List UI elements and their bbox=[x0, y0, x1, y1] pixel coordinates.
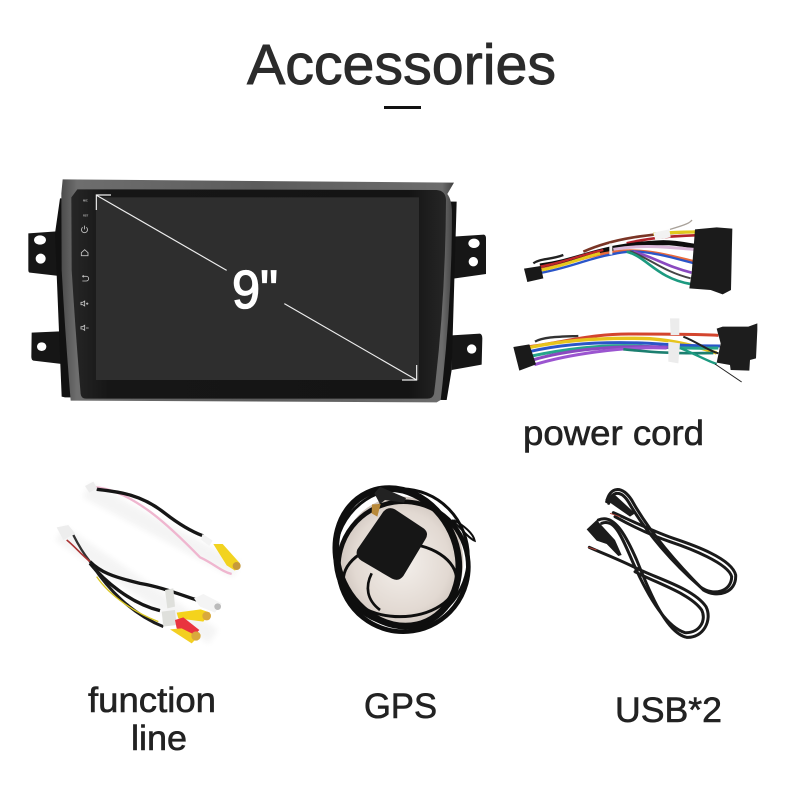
icon: power bbox=[81, 226, 87, 233]
USB cable loops bbox=[589, 490, 736, 637]
side buttons bbox=[81, 199, 89, 330]
USB plug one bbox=[605, 493, 635, 517]
upper yellow RCA plug bbox=[201, 534, 241, 571]
white RCA plug bbox=[194, 594, 222, 613]
black bezel bbox=[71, 189, 446, 399]
upper small connector bbox=[524, 266, 543, 282]
SMA plug bbox=[372, 487, 406, 517]
lower small connector bbox=[513, 344, 536, 371]
panel: 9 inch head unit bbox=[28, 179, 486, 402]
disc behind coil bbox=[340, 497, 463, 627]
size label: 9" bbox=[232, 260, 278, 320]
function: function bbox=[88, 681, 216, 720]
bare wire ends bbox=[588, 513, 620, 550]
antenna puck bbox=[357, 508, 427, 580]
panel: power cord bbox=[513, 220, 757, 382]
icon: back bbox=[82, 275, 89, 281]
red RCA plug bbox=[175, 617, 199, 638]
silver frame bbox=[61, 179, 454, 402]
upper white plug bbox=[85, 482, 97, 493]
yellow RCA plug bbox=[177, 609, 211, 622]
panel: USB cables bbox=[587, 490, 736, 637]
lower cable bundle bbox=[67, 535, 197, 627]
GPS label: GPS bbox=[364, 687, 437, 726]
title: Accessories bbox=[247, 33, 556, 97]
upper label tags bbox=[609, 229, 671, 255]
USB plug two bbox=[587, 520, 622, 556]
panel: function line bbox=[57, 482, 241, 643]
lower label tags bbox=[668, 318, 680, 363]
upper harness bbox=[533, 220, 697, 284]
RST label: RST bbox=[83, 213, 89, 217]
lower harness bbox=[529, 334, 720, 365]
line: line bbox=[131, 719, 187, 758]
diagonal size arrow bbox=[96, 195, 417, 380]
icon: volume up bbox=[81, 301, 88, 306]
power cord label: power cord bbox=[523, 414, 704, 453]
icon: home bbox=[81, 250, 88, 256]
USB label: USB*2 bbox=[615, 691, 722, 730]
upper cable bbox=[95, 487, 232, 574]
soft shadows bbox=[60, 490, 237, 637]
coiled cable bbox=[314, 468, 492, 655]
function line label bbox=[88, 681, 216, 758]
upper large connector bbox=[689, 227, 732, 294]
MIC label: MIC bbox=[83, 199, 88, 203]
label tags bbox=[162, 588, 177, 627]
panel: GPS antenna bbox=[314, 468, 492, 655]
mounting brackets bbox=[28, 231, 486, 370]
title underline bbox=[384, 106, 421, 109]
rear housing bbox=[55, 198, 457, 400]
lower white plug bbox=[57, 525, 75, 540]
screen bbox=[96, 197, 419, 380]
icon: volume down bbox=[81, 325, 89, 330]
lower large connector bbox=[717, 323, 757, 371]
second yellow RCA plug bbox=[170, 628, 201, 643]
